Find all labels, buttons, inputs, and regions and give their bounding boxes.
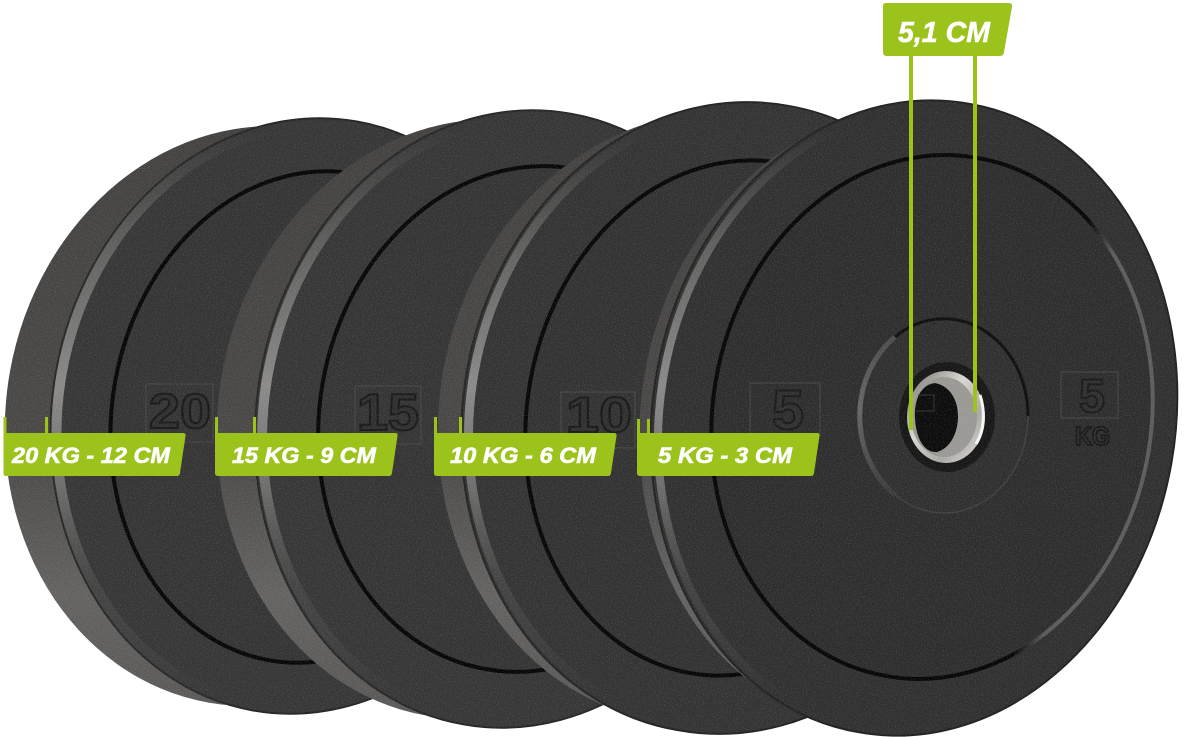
embossed number 10: 10 [566,387,632,443]
label: 20 KG - 12 CM: 20 KG - 12 CM [11,443,171,468]
plate: 10 kg [438,102,1005,734]
label: 10 KG - 6 CM: 10 KG - 6 CM [450,443,597,468]
label: 10 KG - 6 CM [434,417,617,476]
diameter callout: 5,1 cm: 5,1 CM [898,17,991,49]
embossed 5 KG [1061,369,1118,451]
label: 15 KG - 9 CM: 15 KG - 9 CM [232,443,377,468]
label: 15 KG - 9 CM [215,417,398,476]
plate: 5 kg front [639,100,1177,736]
embossed 5 KG: KG [1075,421,1110,451]
embossed number 5 on rear face [750,378,820,441]
label: 5 KG - 3 CM [637,419,820,476]
plate: 20 kg [5,118,560,714]
embossed number 15: 15 [357,384,419,442]
plate: 15 kg [217,110,779,728]
label: 20 KG - 12 CM [4,417,186,476]
embossed number 20: 20 [149,385,211,439]
label: 5 KG - 3 CM: 5 KG - 3 CM [658,443,793,468]
metal bushing [907,371,985,463]
centre hub [860,319,1028,513]
embossed 5 KG: 5 [1079,369,1105,422]
embossed number 5 on rear face: 5 [772,378,804,441]
diameter callout: 5,1 cm [883,3,1012,430]
embossed number 10 [561,387,635,448]
